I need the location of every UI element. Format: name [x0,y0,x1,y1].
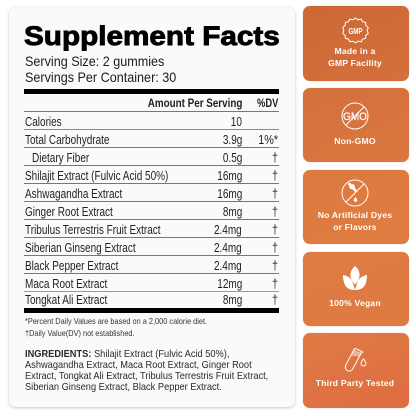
ingredients: Extract, Tongkat Ali Extract, Tribulus Terrestris Fruit Extract, [25,371,268,382]
icon: test tube [344,348,366,372]
ingredients: Siberian Ginseng Extract, Black Pepper Extract. [25,382,222,393]
icon: leaves [343,266,367,290]
row: maca: † [272,276,278,290]
row: tribulus: Tribulus Terrestris Fruit Extract [25,222,161,236]
row: tongkat: Tongkat Ali Extract [25,292,107,306]
card: non-GMO [303,88,409,162]
label: Third Party Tested [316,378,394,388]
row: total carbohydrate: Total Carbohydrate [25,132,110,146]
row: ginger: 8mg [223,204,242,218]
title: Supplement Facts [24,21,280,51]
icon: GMO crossed [342,102,368,130]
icon: GMP seal: GMP [348,27,363,36]
ingredients: INGREDIENTS: Shilajit Extract (Fulvic Acid 50%), [25,349,229,360]
row: ashwagandha: 16mg [217,186,242,200]
row: tribulus: 2.4mg [214,222,242,236]
card: vegan [303,252,409,326]
row: black pepper: † [272,258,278,272]
row: siberian ginseng: † [272,240,278,254]
row: dietary fiber: 0.5g [223,150,242,164]
row: siberian ginseng [24,240,279,256]
row: calories [24,114,279,130]
row: ginger [24,204,279,220]
row: tongkat [25,292,278,306]
row: total carbohydrate [24,132,279,148]
ingredients [25,349,268,393]
servings per container: Servings Per Container: 30 [25,69,176,85]
label: Non-GMO [334,136,376,146]
icon: dropper crossed [342,180,368,206]
icon: GMO crossed: GMO [343,111,367,123]
row: shilajit: Shilajit Extract (Fulvic Acid 50%) [25,168,168,182]
label: Made in a [335,46,375,56]
row: ashwagandha: Ashwagandha Extract [25,186,122,200]
row: shilajit [24,168,279,184]
row: maca: Maca Root Extract [25,276,107,290]
table header [24,96,279,112]
table header: %DV [257,96,278,110]
label [318,210,392,232]
row: siberian ginseng: 2.4mg [214,240,242,254]
row: calories: Calories [25,114,62,128]
row: ashwagandha [24,186,279,202]
row: dietary fiber: † [272,150,278,164]
row: dietary fiber [24,150,279,166]
row: shilajit: † [272,168,278,182]
table header: Amount Per Serving [147,96,242,110]
row: ginger: Ginger Root Extract [25,204,113,218]
card: GMP facility [303,6,409,81]
ingredients: Ashwagandha Extract, Maca Root Extract, Ginger Root [25,360,252,371]
row: black pepper: Black Pepper Extract [25,258,118,272]
row: tribulus [24,222,279,238]
row: siberian ginseng: Siberian Ginseng Extract [25,240,136,254]
row: black pepper: 2.4mg [214,258,242,272]
row: tribulus: † [272,222,278,236]
footnote: not established: †Daily Value(DV) not established. [25,328,135,338]
row: black pepper [24,258,279,274]
label: or Flavors [333,222,377,232]
label: No Artificial Dyes [318,210,392,220]
row: tongkat: † [272,292,278,306]
thick divider bottom [24,308,279,313]
footnote: daily values: *Percent Daily Values are based on a 2,000 calorie diet. [25,316,207,326]
label: 100% Vegan [329,298,381,308]
label [328,46,382,68]
row: calories: 10 [231,114,242,128]
row: shilajit: 16mg [217,168,242,182]
card: third party tested [303,333,409,408]
icon: GMP seal [342,18,369,44]
row: maca: 12mg [217,276,242,290]
row: tongkat: 8mg [223,292,242,306]
row: ashwagandha: † [272,186,278,200]
row: ginger: † [272,204,278,218]
serving size: Serving Size: 2 gummies [25,53,164,69]
row: total carbohydrate: 3.9g [223,132,242,146]
row: total carbohydrate: 1%* [258,132,278,146]
panel: supplement facts [9,7,295,407]
row: dietary fiber: Dietary Fiber [32,150,89,164]
row: maca [24,276,279,292]
label: GMP Facility [328,58,382,68]
thick divider top [24,89,279,94]
card: no artificial dyes [303,170,409,244]
